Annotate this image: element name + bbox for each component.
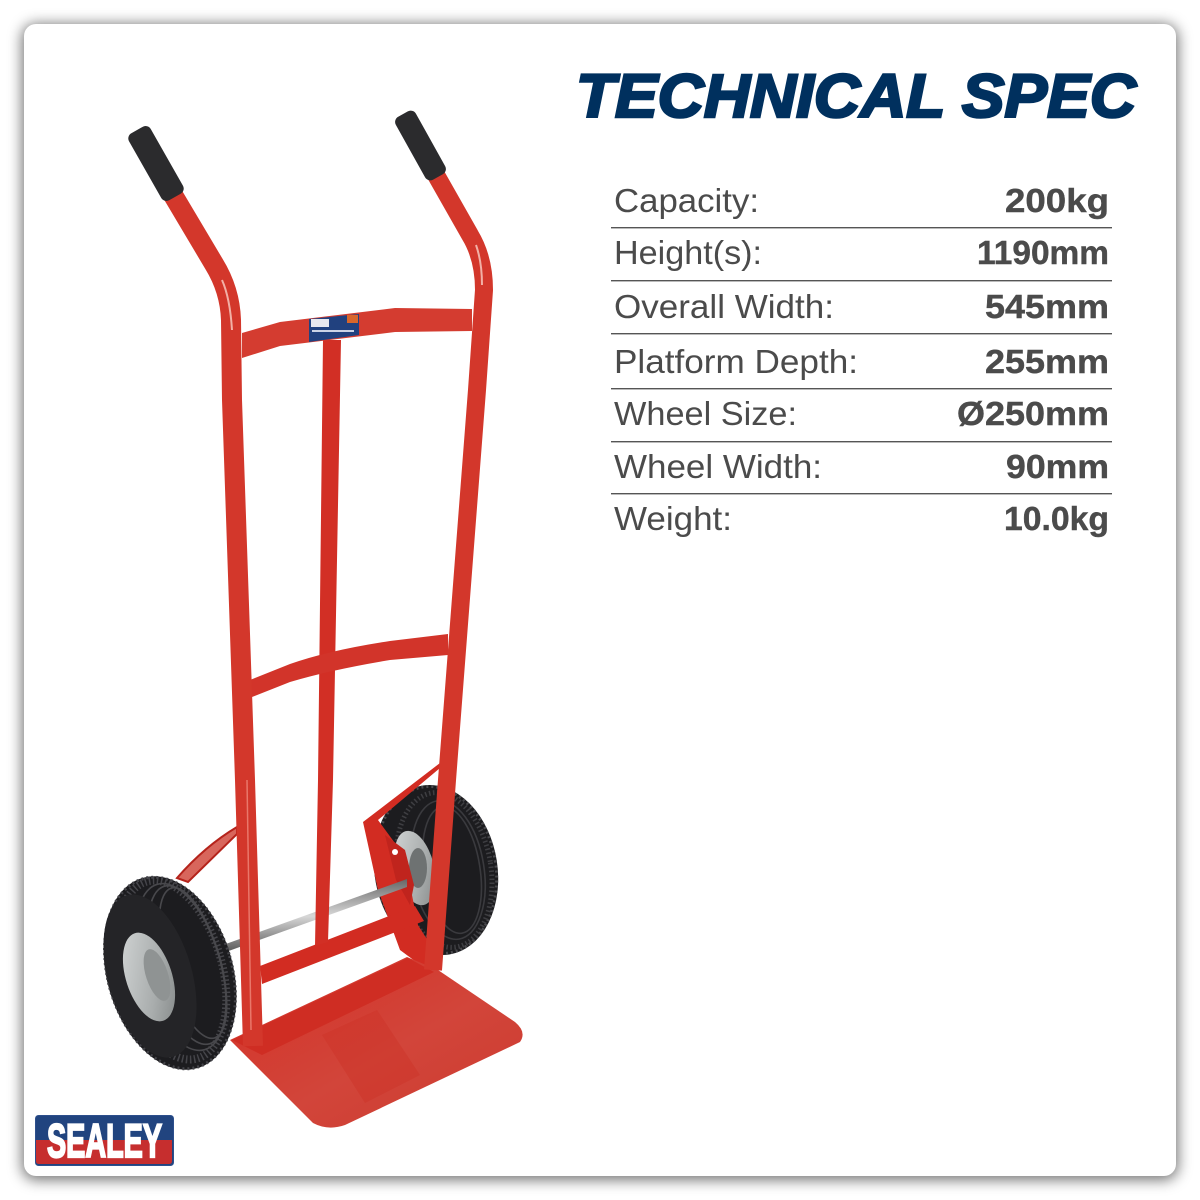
left wheel: [83, 862, 257, 1084]
row: wheel width: 90mm: [1006, 448, 1109, 485]
logo: Sealey: SEALEY: [47, 1114, 162, 1167]
row: overall width: 545mm: [985, 288, 1109, 325]
logo: Sealey: [36, 1114, 174, 1167]
row: weight: Weight:: [614, 500, 732, 537]
row: height: [614, 234, 1109, 271]
row: wheel size: Ø250mm: [957, 395, 1109, 432]
row: platform depth: [614, 343, 1109, 380]
row: weight: 10.0kg: [1004, 500, 1109, 537]
row: wheel size: Wheel Size:: [614, 395, 797, 432]
right tube and handle: [393, 108, 484, 970]
lower cross bar: [250, 634, 448, 697]
row: overall width: [614, 288, 1109, 325]
axle: [223, 879, 407, 953]
row: weight: [614, 500, 1109, 537]
row: capacity: 200kg: [1005, 182, 1109, 219]
centre upright: [315, 340, 341, 946]
illustration: red sack truck: [83, 108, 523, 1128]
row: platform depth: Platform Depth:: [614, 343, 858, 380]
left wheel strut: [177, 827, 237, 882]
row: overall width: Overall Width:: [614, 288, 834, 325]
platform plate: [230, 957, 523, 1128]
right wheel: [364, 778, 508, 962]
row: wheel size: [614, 395, 1109, 432]
lower chassis bar: [260, 906, 424, 984]
title: TECHNICAL SPEC: [576, 62, 1137, 130]
row: capacity: [614, 182, 1109, 219]
right wheel bracket: [363, 763, 440, 970]
spec table: [611, 182, 1112, 537]
row: capacity: Capacity:: [614, 182, 759, 219]
row: height: 1190mm: [977, 234, 1109, 271]
row: platform depth: 255mm: [985, 343, 1109, 380]
top cross bar: [242, 308, 472, 358]
left tube and handle: [126, 124, 253, 1046]
product label: [309, 314, 359, 342]
row: wheel width: Wheel Width:: [614, 448, 822, 485]
row: wheel width: [614, 448, 1109, 485]
row: height: Height(s):: [614, 234, 762, 271]
